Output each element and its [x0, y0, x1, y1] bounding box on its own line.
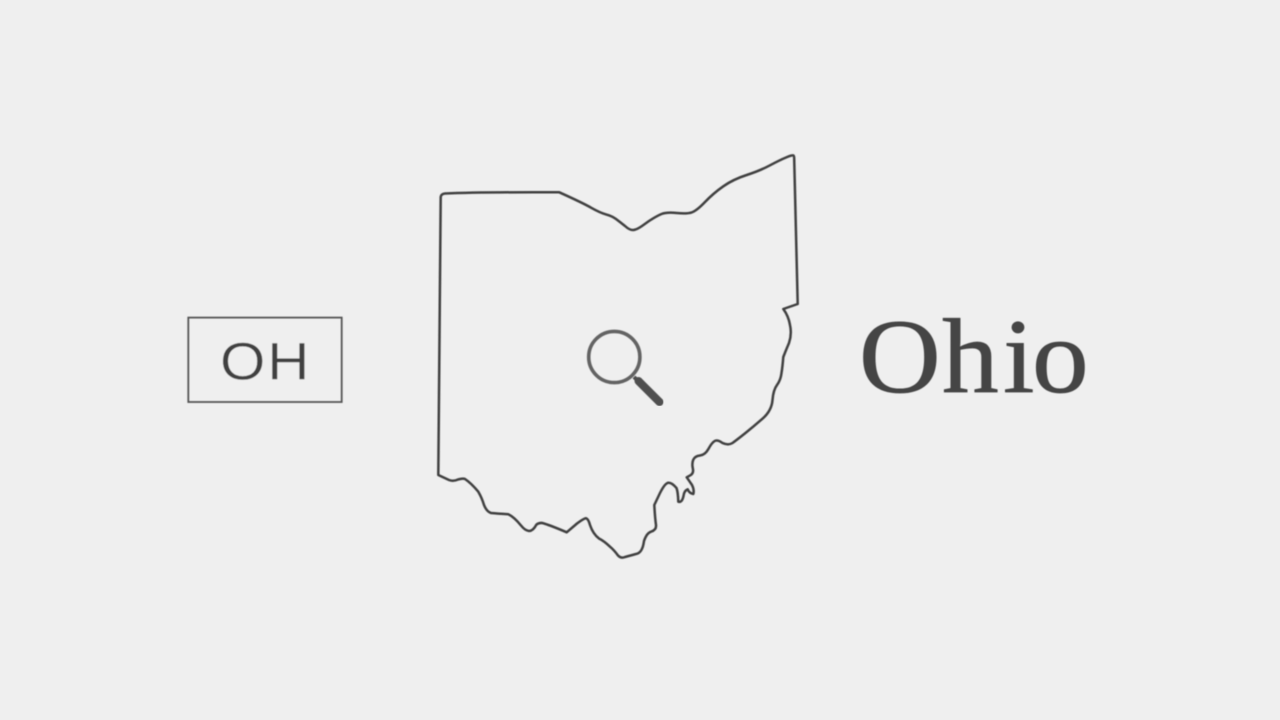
state name: Ohio: Ohio — [859, 297, 1089, 415]
abbreviation box: OH: OH — [220, 332, 309, 391]
map outline: state of Ohio — [438, 155, 798, 558]
abbreviation box: OH — [188, 318, 342, 402]
icon: magnifying glass — [589, 331, 660, 402]
